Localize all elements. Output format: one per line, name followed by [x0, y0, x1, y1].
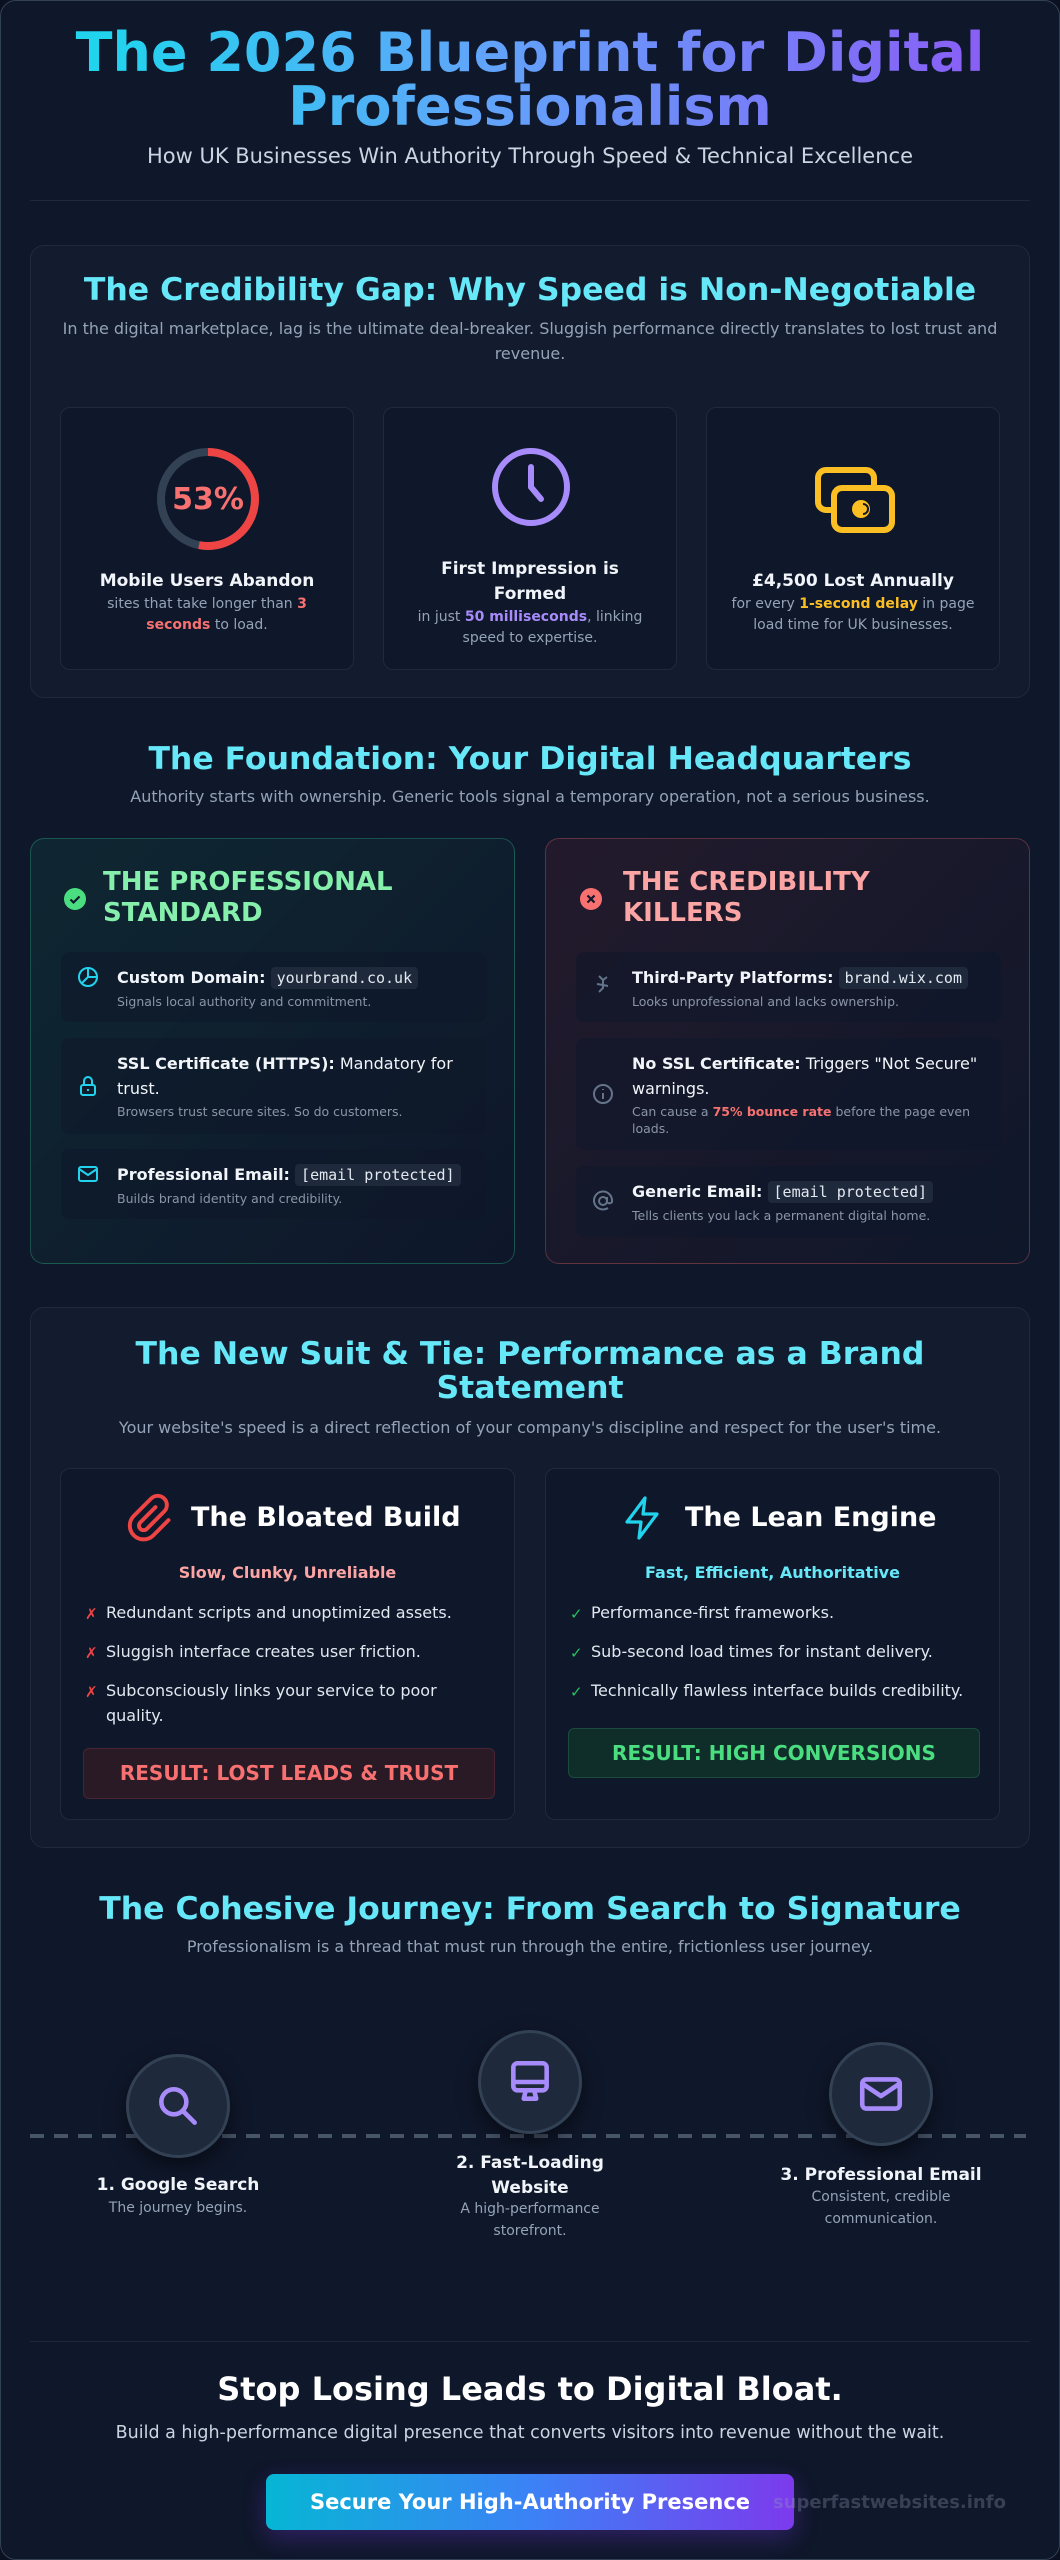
- chart: donut 53%: [157, 448, 259, 550]
- panel heading: STANDARD: [103, 898, 263, 928]
- card text: [107, 596, 307, 633]
- bullet list: ✗: [85, 1683, 98, 1701]
- step 1: google search: 1. Google Search: [97, 2175, 259, 2195]
- item: custom domain: Signals local authority and commitment.: [117, 994, 371, 1009]
- CTA heading: Stop Losing Leads to Digital Bloat.: [217, 2370, 843, 2408]
- step 1: google search: The journey begins.: [109, 2200, 247, 2216]
- bullet list: ✓: [570, 1605, 583, 1623]
- title: The 2026 Blueprint for Digital: [76, 21, 984, 84]
- step 2: fast website: storefront.: [493, 2223, 567, 2239]
- card: first impression: [383, 407, 677, 670]
- item: third-party: Third-Party Platforms: brand.wix.com: [632, 968, 962, 987]
- watermark: superfastwebsites.info: [773, 2492, 1006, 2513]
- card title: £4,500 Lost Annually: [752, 571, 954, 591]
- card: bloated build: [60, 1468, 515, 1820]
- result box: RESULT: LOST LEADS & TRUST: [120, 1761, 458, 1785]
- card text: for every 1-second delay in page: [732, 596, 974, 612]
- card text: [418, 609, 642, 646]
- panel heading: [623, 867, 870, 928]
- heading: suit & tie: Statement: [436, 1370, 624, 1406]
- item: SSL: trust.: [117, 1079, 160, 1098]
- bullet list: [85, 1603, 452, 1725]
- card: lean engine: [545, 1468, 1000, 1820]
- icon: paperclip: [128, 1494, 171, 1542]
- step 2: fast website: A high-performance: [460, 2201, 600, 2217]
- text: suit & tie intro: Your website's speed is a direct reflection of your company's discipline and respect for the user's time.: [119, 1418, 941, 1437]
- icon: lightning: [625, 1496, 659, 1540]
- card text: in just 50 milliseconds, linking: [418, 609, 642, 625]
- step 3: professional email: [780, 2042, 982, 2227]
- card title: Mobile Users Abandon: [100, 571, 314, 591]
- text: credibility gap intro: In the digital marketplace, lag is the ultimate deal-breaker. Sluggish performance directly translates to lost trust and: [63, 319, 997, 338]
- card: 53% mobile users: [60, 407, 354, 670]
- icon: search: [126, 2054, 230, 2158]
- item: no SSL: Can cause a 75% bounce rate before the page even: [632, 1104, 970, 1119]
- text: foundation intro: Authority starts with ownership. Generic tools signal a temporary operation, not a serious business.: [130, 787, 930, 806]
- step 3: professional email: 3. Professional Email: [780, 2165, 982, 2185]
- item: custom domain: Custom Domain: yourbrand.co.uk: [117, 968, 412, 987]
- step 3: professional email: communication.: [825, 2211, 937, 2227]
- item: SSL: SSL Certificate (HTTPS): Mandatory for: [117, 1054, 453, 1073]
- heading: foundation: The Foundation: Your Digital Headquarters: [148, 741, 912, 777]
- text: journey intro: Professionalism is a thread that must run through the entire, frictionless user journey.: [187, 1937, 873, 1956]
- heading: credibility gap: The Credibility Gap: Why Speed is Non-Negotiable: [84, 272, 976, 308]
- heading: suit & tie: [136, 1336, 924, 1406]
- icon: clock: [492, 448, 570, 526]
- item: professional email: Professional Email: [email protected]: [117, 1165, 455, 1184]
- title: Professionalism: [288, 75, 772, 138]
- bullet list: [570, 1603, 963, 1701]
- bullet list: Performance-first frameworks.: [591, 1603, 834, 1622]
- dashed line: [30, 2134, 1026, 2138]
- text: credibility gap intro: [63, 319, 997, 363]
- panel heading: THE CREDIBILITY: [623, 867, 870, 897]
- text: credibility gap intro: revenue.: [495, 344, 565, 363]
- title: [10, 26, 1050, 134]
- result box: [83, 1748, 495, 1799]
- panel heading: [103, 867, 393, 928]
- heading: journey: The Cohesive Journey: From Search to Signature: [99, 1891, 961, 1927]
- item: generic email: Generic Email: [email protected]: [632, 1182, 927, 1201]
- card text: sites that take longer than 3: [107, 596, 307, 612]
- card text: seconds to load.: [146, 617, 268, 633]
- bullet list: Redundant scripts and unoptimized assets.: [106, 1603, 452, 1622]
- CTA button: Secure Your High-Authority Presence: [310, 2490, 750, 2514]
- bullet list: ✓: [570, 1683, 583, 1701]
- item: custom domain: [61, 952, 486, 1022]
- icon: monitor: [478, 2030, 582, 2134]
- card text: load time for UK businesses.: [753, 617, 953, 633]
- panel: suit & tie: [30, 1307, 1030, 1848]
- panel: credibility killers: [545, 838, 1030, 1264]
- bullet list: ✗: [85, 1605, 98, 1623]
- item: third-party: Looks unprofessional and lacks ownership.: [632, 994, 899, 1009]
- subtitle: Fast, Efficient, Authoritative: [645, 1563, 900, 1582]
- card heading: The Lean Engine: [685, 1502, 936, 1533]
- panel heading: THE PROFESSIONAL: [103, 867, 393, 897]
- CTA text: Build a high-performance digital presence that converts visitors into revenue without the wait.: [116, 2423, 944, 2443]
- icon: check: [64, 888, 86, 910]
- card text: [732, 596, 974, 633]
- bullet list: ✗: [85, 1644, 98, 1662]
- result box: [568, 1728, 980, 1778]
- card title: [441, 559, 619, 604]
- card title: Formed: [494, 584, 566, 604]
- step 2: fast website: Website: [491, 2178, 569, 2198]
- card heading: The Bloated Build: [191, 1502, 461, 1533]
- item: SSL: [61, 1038, 486, 1134]
- card title: First Impression is: [441, 559, 619, 579]
- panel: professional standard: [30, 838, 515, 1264]
- icon: x: [580, 888, 602, 910]
- CTA button: [266, 2474, 794, 2530]
- item: no SSL: No SSL Certificate: Triggers "Not Secure": [632, 1054, 977, 1073]
- icon: envelope: [829, 2042, 933, 2146]
- item: generic email: Tells clients you lack a permanent digital home.: [632, 1208, 930, 1223]
- step 2: fast website: [456, 2030, 604, 2239]
- heading: suit & tie: The New Suit & Tie: Performance as a Brand: [136, 1336, 924, 1372]
- panel heading: KILLERS: [623, 898, 742, 928]
- step 2: fast website: 2. Fast-Loading: [456, 2153, 604, 2173]
- item: third-party: [576, 952, 1001, 1022]
- panel: credibility gap: [30, 245, 1030, 698]
- bullet list: Sluggish interface creates user friction.: [106, 1642, 421, 1661]
- icon: money: [815, 467, 895, 533]
- subtitle: How UK Businesses Win Authority Through Speed & Technical Excellence: [147, 144, 913, 168]
- item: no SSL: [576, 1038, 1001, 1150]
- bullet list: ✓: [570, 1644, 583, 1662]
- result box: RESULT: HIGH CONVERSIONS: [612, 1741, 936, 1765]
- step 1: google search: [97, 2054, 259, 2216]
- bullet list: quality.: [106, 1706, 164, 1725]
- step 3: professional email: Consistent, credible: [812, 2189, 950, 2205]
- card: £4,500 lost: [706, 407, 1000, 670]
- chart: donut 53%: 53%: [172, 482, 244, 517]
- card text: speed to expertise.: [463, 630, 597, 646]
- item: SSL: Browsers trust secure sites. So do customers.: [117, 1104, 403, 1119]
- item: professional email: Builds brand identity and credibility.: [117, 1191, 342, 1206]
- bullet list: Technically flawless interface builds credibility.: [591, 1681, 963, 1700]
- item: generic email: [576, 1166, 1001, 1237]
- bullet list: Sub-second load times for instant delivery.: [591, 1642, 933, 1661]
- subtitle: Slow, Clunky, Unreliable: [179, 1563, 396, 1582]
- item: no SSL: warnings.: [632, 1079, 710, 1098]
- item: professional email: [61, 1149, 486, 1219]
- item: no SSL: loads.: [632, 1121, 669, 1136]
- bullet list: Subconsciously links your service to poor: [106, 1681, 437, 1700]
